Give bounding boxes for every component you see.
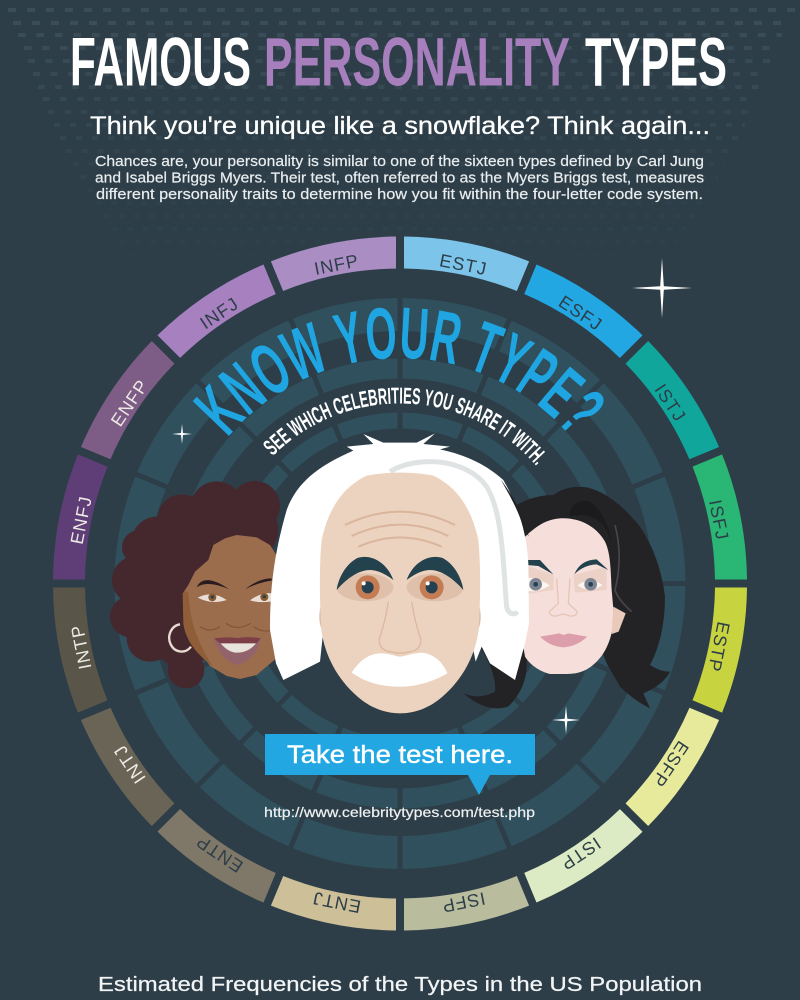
segment: INTP [30, 576, 128, 713]
ears [470, 602, 481, 632]
brows [197, 578, 272, 589]
ear [612, 607, 626, 634]
icon: large star [632, 258, 692, 318]
grey hair streak [390, 462, 517, 614]
segment: INFJ: INFJ [196, 293, 242, 333]
moustache [352, 653, 447, 687]
forehead wrinkles [345, 512, 455, 547]
segment: ESTJ [404, 236, 529, 291]
icon: small star left [172, 424, 192, 444]
mouth [214, 639, 261, 665]
segment: ESFJ: ESFJ [555, 292, 606, 335]
callout: take the test [265, 734, 535, 795]
eyebrows [407, 557, 463, 590]
title [70, 24, 727, 100]
nose [549, 578, 577, 616]
eye patches [407, 573, 463, 601]
title: PERSONALITY [264, 24, 570, 100]
intro text block [95, 154, 704, 203]
face [522, 518, 614, 674]
eyes [198, 593, 272, 602]
nose [379, 602, 421, 653]
segment: ESFP [621, 699, 719, 836]
outer ring of sixteen types [30, 214, 770, 953]
bottom heading: Estimated Frequencies of the Types in the US Population [98, 973, 702, 996]
segment: INFP: INFP [313, 251, 361, 279]
intro text block: and Isabel Briggs Myers. Their test, often referred to as the Myers Briggs test, measures [95, 170, 704, 186]
segment: ESTJ: ESTJ [438, 250, 489, 279]
black hair [463, 487, 670, 708]
segment: ESFJ [516, 264, 652, 363]
icon: small star bottom [552, 706, 580, 734]
subheading: see which celebrities: SEE WHICH CELEBRITIES YOU SHARE IT WITH. [264, 388, 545, 466]
earring [169, 624, 191, 652]
subtitle: Think you're unique like a snowflake? Think again... [90, 112, 710, 140]
hair shadow strands [501, 479, 529, 537]
callout: take the test: Take the test here. [287, 741, 513, 769]
segment: ISTJ [610, 341, 737, 468]
portrait: woman with curly hair [110, 481, 282, 688]
segment: ENFJ [53, 454, 108, 580]
intro text block: Chances are, your personality is similar to one of the sixteen types defined by Carl Jung [95, 154, 704, 170]
hair highlight [570, 501, 612, 543]
segment: INTJ [63, 699, 190, 826]
portrait: man with long black hair [463, 487, 670, 708]
title: FAMOUS [70, 24, 251, 100]
segment: ISFP [393, 855, 529, 953]
inner target rings [106, 290, 694, 877]
nose and smile lines [200, 623, 272, 631]
segment: ISTJ: ISTJ [651, 380, 690, 426]
segment: ESFP: ESFP [648, 737, 693, 791]
segment: ESTP: ESTP [704, 620, 734, 674]
segment: ENFP: ENFP [107, 376, 153, 430]
eyes [420, 575, 444, 599]
intro text block: different personality traits to determine how you fit within the four-letter code system. [96, 187, 703, 203]
segment: ESTP [692, 588, 747, 713]
face shadow [183, 592, 213, 667]
face [320, 473, 480, 713]
segment: INTP: INTP [67, 623, 95, 671]
segment: ISFJ: ISFJ [705, 498, 733, 542]
lips [540, 633, 587, 647]
segment: ENTP [148, 804, 284, 903]
segment: ENFJ: ENFJ [67, 494, 96, 546]
brows [527, 559, 608, 574]
segment: INFJ [157, 247, 284, 374]
segment: INTJ: INTJ [110, 741, 150, 787]
white hair [270, 433, 529, 680]
segment: ENTP: ENTP [192, 831, 247, 876]
face [183, 535, 282, 679]
segment: ENFP [81, 331, 179, 468]
test url: http://www.celebritytypes.com/test.php [264, 804, 535, 820]
eyes [527, 578, 603, 591]
segment: ENTJ: ENTJ [311, 888, 363, 917]
eye shading [525, 565, 607, 594]
segment: ISFP: ISFP [440, 888, 487, 916]
segment: ENTJ [271, 876, 396, 930]
segment: INFP [271, 214, 407, 312]
segment: ISTP [516, 793, 643, 920]
portrait: Einstein [270, 433, 529, 713]
segment: ISFJ [672, 454, 770, 591]
curly hair [110, 481, 280, 688]
segment: ISTP: ISTP [557, 833, 604, 874]
heading: know your type: KNOW YOUR TYPE? [192, 308, 604, 436]
